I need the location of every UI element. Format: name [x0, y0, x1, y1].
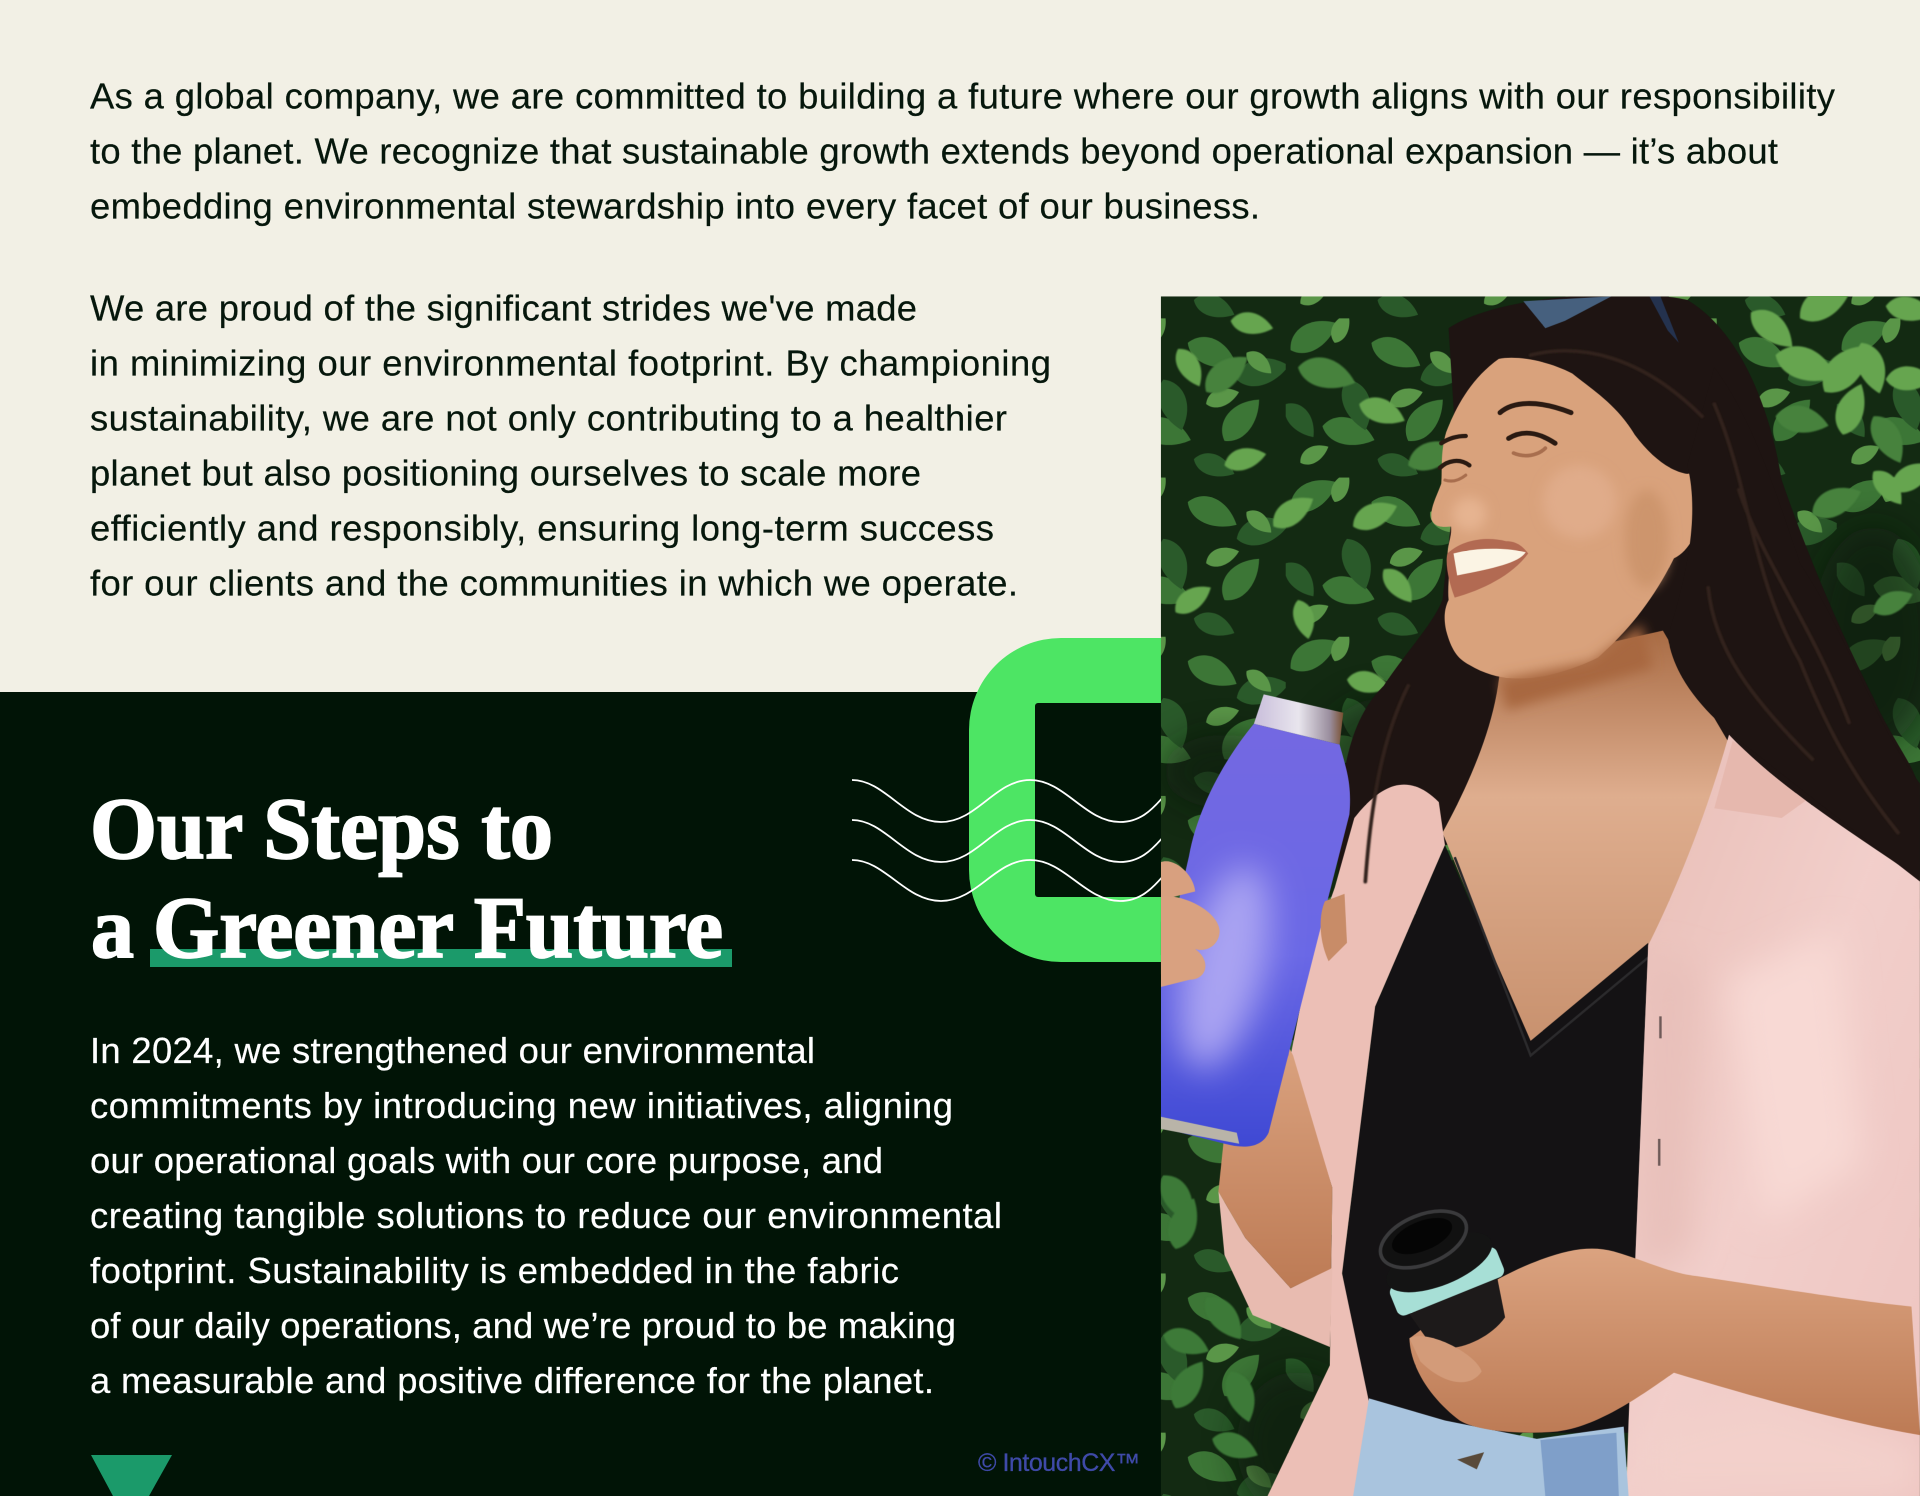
body paragraph on dark panel: creating tangible solutions to reduce our environmental — [90, 1195, 1002, 1236]
second paragraph: We are proud of the significant strides we've made — [90, 288, 917, 328]
right arm and hand — [1409, 1249, 1920, 1435]
icon: green downward triangle — [91, 1455, 172, 1496]
body paragraph on dark panel: our operational goals with our core purpose, and — [90, 1140, 883, 1181]
body paragraph on dark panel: In 2024, we strengthened our environmental — [90, 1030, 815, 1071]
panel: dark green lower section — [0, 692, 1161, 1496]
hair highlights — [1365, 351, 1898, 882]
intro paragraph: embedding environmental stewardship into every facet of our business. — [90, 186, 1260, 226]
v-neck collar seam — [1455, 857, 1648, 1056]
second paragraph — [90, 288, 1051, 604]
second paragraph: for our clients and the communities in which we operate. — [90, 562, 1018, 604]
long dark hair, back layer — [1338, 296, 1916, 874]
heading: Our Steps to a Greener Future: Our Steps to — [90, 781, 553, 878]
face — [1431, 358, 1699, 679]
intro paragraph: to the planet. We recognize that sustainable growth extends beyond operational expansion — it’s about — [90, 130, 1778, 172]
jeans — [1353, 1398, 1629, 1496]
body paragraph on dark panel: commitments by introducing new initiatives, aligning — [90, 1085, 953, 1126]
eyes and eyebrows — [1440, 403, 1571, 481]
bottle cap held in hand — [1367, 1193, 1525, 1364]
intro paragraph — [90, 76, 1836, 226]
second paragraph: efficiently and responsibly, ensuring long-term success — [90, 508, 994, 548]
mouth with smile — [1447, 539, 1528, 598]
sunglasses on head — [1523, 296, 1679, 343]
shirt folds and highlights — [1641, 741, 1920, 1496]
purple water bottle — [1161, 694, 1350, 1147]
body paragraph on dark panel — [90, 1030, 1002, 1401]
body paragraph on dark panel: footprint. Sustainability is embedded in the fabric — [90, 1250, 899, 1291]
second paragraph: in minimizing our environmental footprint. By championing — [90, 342, 1051, 384]
hand fingers over cap — [1409, 1336, 1482, 1382]
green rounded bracket shape — [969, 638, 1261, 962]
heading: Our Steps to a Greener Future: a — [91, 880, 134, 977]
face shading — [1452, 465, 1669, 710]
shirt: left front panel — [1267, 785, 1445, 1496]
body paragraph on dark panel: of our daily operations, and we’re proud to be making — [90, 1305, 956, 1346]
neck and chest skin — [1442, 631, 1733, 1047]
heading: Our Steps to a Greener Future — [90, 781, 732, 977]
hair strands over right shoulder — [1668, 367, 1920, 882]
wavy lines decoration — [852, 780, 1164, 901]
foliage background — [1153, 275, 1920, 1496]
body paragraph on dark panel: a measurable and positive difference for the planet. — [90, 1360, 934, 1401]
hand holding bottle — [1161, 861, 1347, 987]
intro paragraph: As a global company, we are committed to building a future where our growth aligns with our responsibility — [90, 76, 1836, 116]
photo: smiling woman holding a purple bottle in front of foliage — [1153, 275, 1920, 1496]
left arm — [1218, 1041, 1332, 1288]
second paragraph: planet but also positioning ourselves to scale more — [90, 452, 921, 494]
shirt: right side — [1626, 735, 1920, 1496]
black v-neck top — [1342, 845, 1648, 1433]
shirt: left rolled sleeve — [1218, 1191, 1332, 1347]
heading: Our Steps to a Greener Future: Greener Future — [153, 880, 723, 977]
second paragraph: sustainability, we are not only contributing to a healthier — [90, 398, 1007, 438]
copyright text: © IntouchCX™ — [978, 1449, 1140, 1477]
